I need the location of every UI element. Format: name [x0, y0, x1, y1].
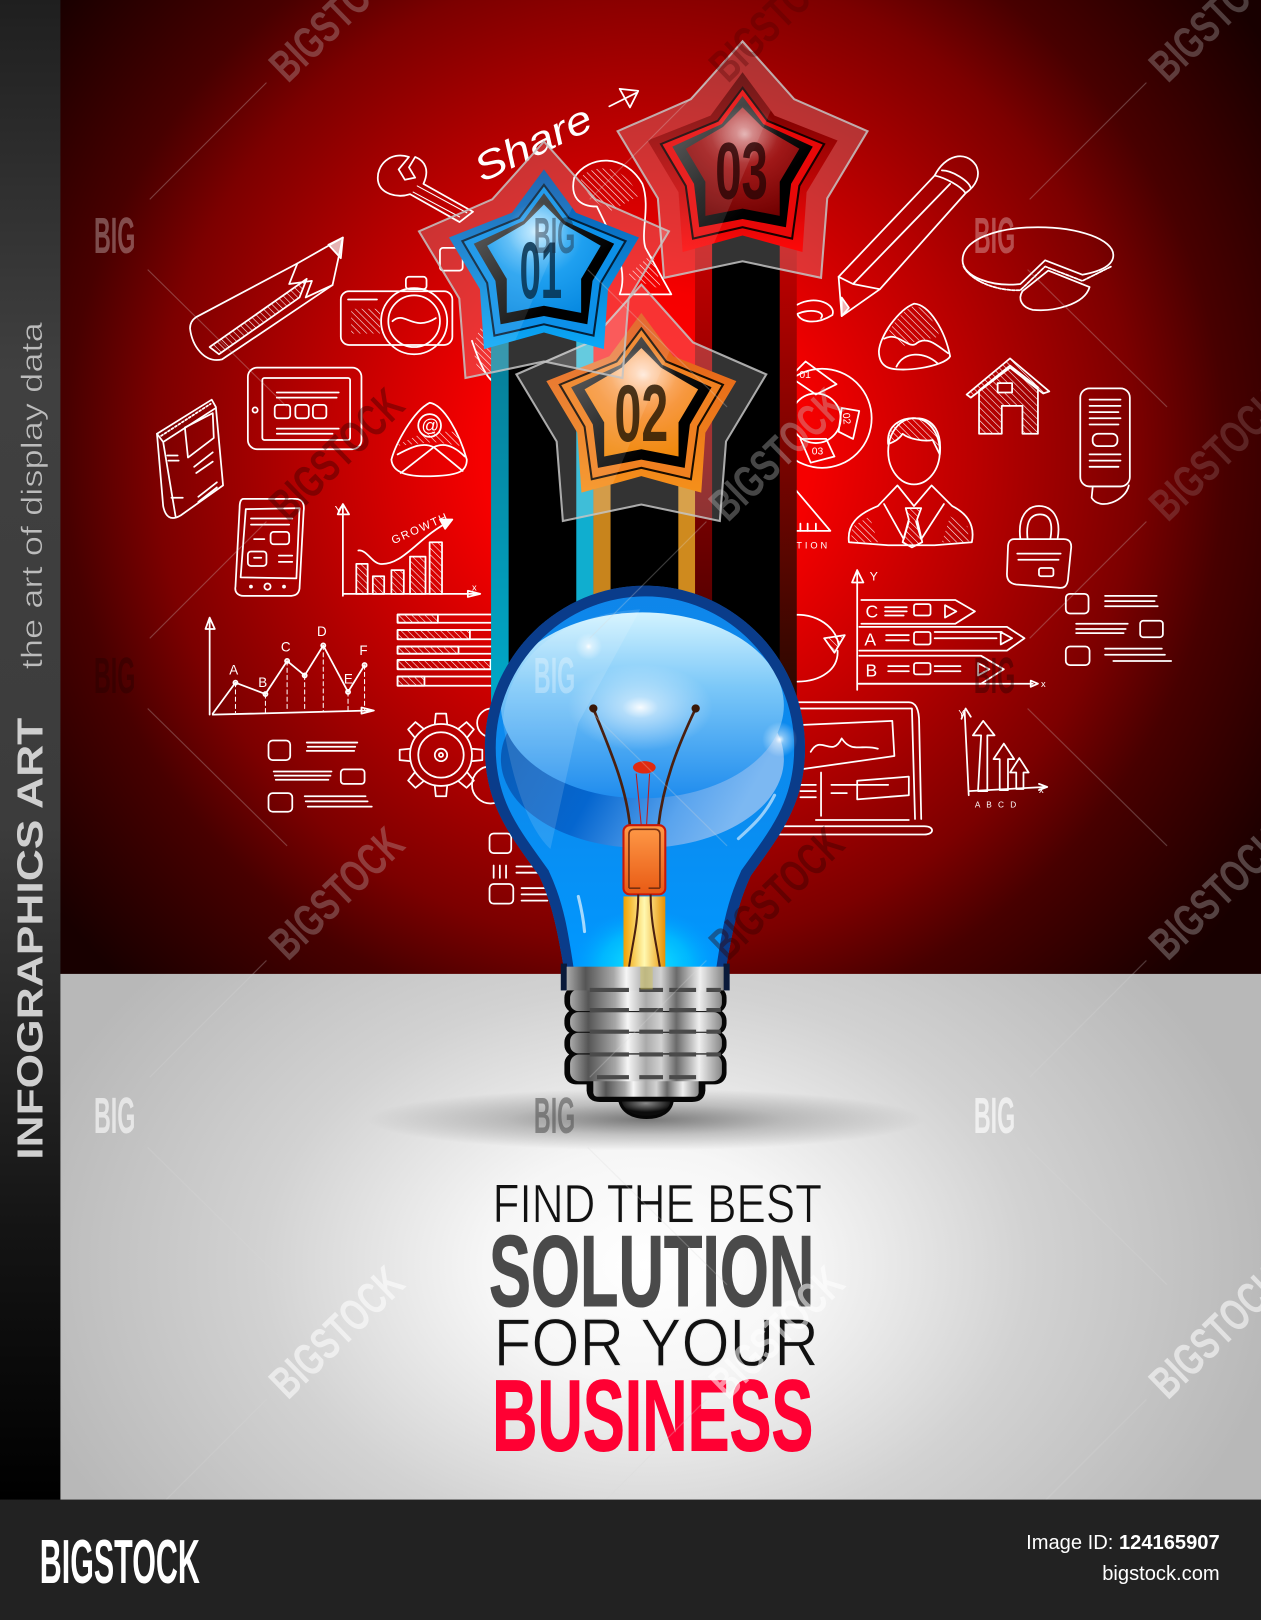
chart: small arrow growth sketch: A B C D	[975, 801, 1016, 810]
icon: left text block sketch	[269, 740, 372, 812]
bulb stem	[623, 825, 665, 968]
chart: pie chart sketch	[963, 227, 1113, 310]
chart: arrow bars sketch with labels C A B: C	[865, 602, 878, 622]
watermarks: diagonal BIGSTOCK tiles: BIGSTOCK	[699, 818, 854, 969]
chart: small arrow growth sketch: Y	[958, 709, 965, 719]
watermarks: BIG tiles	[94, 207, 1015, 1144]
chart: arrow bars sketch with labels C A B: Y	[870, 569, 878, 583]
icon: left pencil sketch	[190, 238, 343, 360]
headline: find the best solution for your business	[489, 1172, 822, 1473]
icon: padlock sketch	[1007, 506, 1071, 588]
chart: line chart sketch with labels A to F: F	[359, 643, 368, 658]
star badge 02	[516, 285, 766, 521]
star 03 glass frame	[618, 41, 868, 278]
icon: email envelope sketch: @	[421, 416, 439, 436]
watermarks: BIG tiles: BIG	[94, 207, 135, 264]
icon: lower text block sketch	[490, 833, 547, 904]
icon: large right pencil sketch	[797, 156, 978, 322]
label: Share handwritten arrow	[467, 89, 638, 191]
headline line 4: BUSINESS	[492, 1360, 813, 1473]
footer bar: BIGSTOCK	[40, 1528, 200, 1597]
watermarks: diagonal BIGSTOCK tiles	[260, 0, 1261, 1408]
icon: house sketch	[967, 358, 1049, 434]
chart: growth bar sketch: Y	[335, 504, 343, 516]
watermarks: BIG tiles: BIG	[534, 1087, 575, 1144]
icon: laptop sketch	[780, 702, 932, 834]
chart: line chart sketch with labels A to F: D	[317, 624, 327, 639]
icon: ruler triangle sketch	[796, 491, 830, 550]
headline line 3: FOR YOUR	[494, 1305, 819, 1381]
watermarks: BIG tiles: BIG	[534, 647, 575, 704]
icon: circle with arrow sketch	[785, 615, 845, 682]
watermarks: diagonal BIGSTOCK tiles: BIGSTOCK	[699, 1256, 854, 1408]
shadow under bulb	[367, 1089, 924, 1151]
bulb screw base	[561, 964, 730, 1117]
chart: line chart sketch with labels A to F: B	[258, 675, 267, 690]
icon: ruler triangle sketch: TION	[796, 540, 827, 550]
icon: camera sketch	[341, 277, 452, 354]
watermarks: diagonal BIGSTOCK tiles: BIGSTOCK	[260, 818, 414, 969]
chart: small arrow growth sketch: x	[1039, 785, 1044, 795]
star 01 glass frame	[419, 141, 669, 378]
sidebar brand title: INFOGRAPHICS ART	[9, 718, 50, 1160]
icon: tablet sketch	[248, 368, 361, 449]
bulb highlights	[762, 722, 797, 757]
filament supports	[589, 704, 700, 826]
icon: smartphone sketch	[235, 499, 304, 596]
chart: numbered circular diagram sketch: 01	[799, 370, 811, 381]
icon: gears sketch	[400, 708, 509, 803]
bulb glass	[484, 586, 806, 967]
chart: arrow bars sketch with labels C A B: B	[865, 660, 877, 680]
star 01 coloured body	[446, 167, 639, 353]
icon: wrench sketch	[378, 156, 473, 222]
chart: line chart sketch with labels A to F	[206, 618, 374, 715]
icon: strawberry sketch behind stars	[440, 161, 671, 384]
panel: left sidebar	[0, 0, 60, 1501]
chart: line chart sketch with labels A to F: C	[281, 640, 291, 655]
icon: right envelope sketch	[879, 304, 950, 370]
watermarks: diagonal BIGSTOCK tiles: BIGSTOCK	[260, 1256, 414, 1408]
chart: line chart sketch with labels A to F: E	[344, 672, 353, 687]
sidebar tagline: the art of display data	[16, 322, 49, 669]
stripes: coloured columns behind the bulb	[491, 222, 797, 713]
watermarks: BIG tiles: BIG	[94, 1087, 135, 1144]
star badge 03	[618, 41, 868, 278]
infographic canvas: BIG	[974, 1087, 1015, 1144]
label: Share handwritten arrow: Share	[467, 96, 599, 191]
chart: arrow bars sketch with labels C A B: x	[1041, 679, 1046, 689]
icon: speech phone sketch	[1080, 388, 1130, 504]
number 02: 02	[614, 369, 668, 459]
star badge 01	[419, 141, 669, 378]
chart: small arrow growth sketch	[958, 708, 1047, 810]
chart: growth bar sketch	[335, 504, 480, 597]
headline line 2: SOLUTION	[489, 1215, 814, 1328]
infographic canvas: BIG	[974, 647, 1015, 704]
watermarks: diagonal BIGSTOCK tiles: BIGSTOCK	[260, 379, 414, 530]
icon: book sketch	[157, 400, 223, 518]
watermarks: BIG tiles: BIG	[94, 647, 135, 704]
icon: email envelope sketch	[391, 403, 467, 476]
star 02 coloured body	[543, 311, 736, 497]
star 03 coloured body	[644, 70, 838, 256]
icon: right text block sketch	[1066, 594, 1171, 665]
panel: red background	[60, 0, 1261, 974]
chart: numbered circular diagram sketch: 02	[840, 412, 852, 425]
chart: growth bar sketch: x	[472, 583, 477, 593]
star 01 coloured body: 01	[520, 226, 562, 316]
bulb: blue light bulb	[485, 586, 805, 1117]
number 03: 03	[715, 126, 768, 216]
footer bar	[0, 1500, 1261, 1620]
chart: numbered circular diagram sketch: 03	[812, 446, 823, 457]
icon: businessman sketch	[849, 418, 973, 547]
headline line 1: FIND THE BEST	[493, 1172, 822, 1234]
chart: line chart sketch with labels A to F: A	[229, 662, 238, 677]
footer image id: Image ID: 124165907	[1026, 1532, 1220, 1554]
chart: numbered circular diagram sketch	[773, 361, 872, 468]
star 02 glass frame	[516, 285, 766, 521]
footer site url: bigstock.com	[1102, 1563, 1220, 1585]
chart: arrow bars sketch with labels C A B: A	[864, 629, 876, 649]
chart: growth bar sketch: GROWTH	[390, 512, 449, 547]
infographic canvas: BIG	[974, 207, 1015, 264]
watermarks: diagonal BIGSTOCK tiles: BIGSTOCK	[699, 379, 854, 530]
watermarks: BIG tiles: BIG	[534, 207, 575, 264]
chart: horizontal bars sketch	[398, 614, 493, 686]
panel: grey floor	[60, 974, 1261, 1501]
chart: arrow bars sketch with labels C A B	[852, 569, 1046, 690]
